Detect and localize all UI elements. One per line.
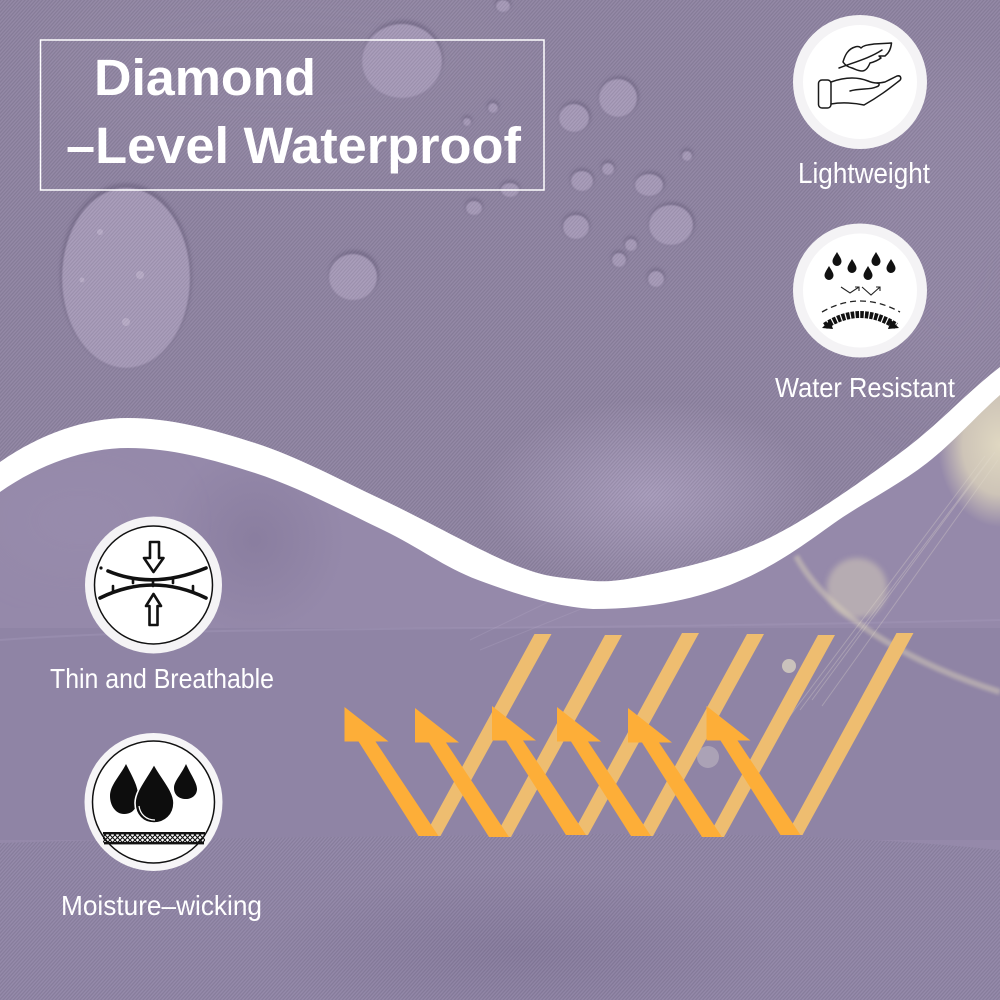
title line 2: –Level Waterproof — [66, 117, 522, 174]
icon: hand and feather — [793, 15, 927, 149]
label: Thin and Breathable — [50, 663, 274, 694]
label: Moisture–wicking — [61, 890, 262, 921]
feature: Moisture-wicking — [61, 733, 262, 921]
icon: compressing layers — [85, 516, 222, 654]
label: Lightweight — [798, 158, 930, 190]
label: Water Resistant — [775, 372, 955, 403]
lens flare — [470, 363, 1000, 768]
white wave band — [0, 367, 1000, 609]
panel: lower bottom fabric fold — [0, 834, 1000, 1000]
title box — [40, 40, 544, 190]
fabric weave texture: bottom — [0, 834, 1000, 1000]
icon: droplets repelled by membrane — [793, 224, 927, 358]
moisture-wicking zigzag arrows — [344, 633, 914, 837]
water droplets — [60, 0, 695, 368]
panel: upper fabric with water droplets — [0, 0, 1000, 620]
icon: water drops over mesh — [84, 733, 222, 871]
feature: Lightweight — [793, 15, 930, 190]
title line 1: Diamond — [94, 49, 316, 106]
feature: Water Resistant — [775, 224, 955, 403]
fabric weave texture — [0, 0, 1000, 581]
feature: Thin and Breathable — [50, 516, 274, 694]
